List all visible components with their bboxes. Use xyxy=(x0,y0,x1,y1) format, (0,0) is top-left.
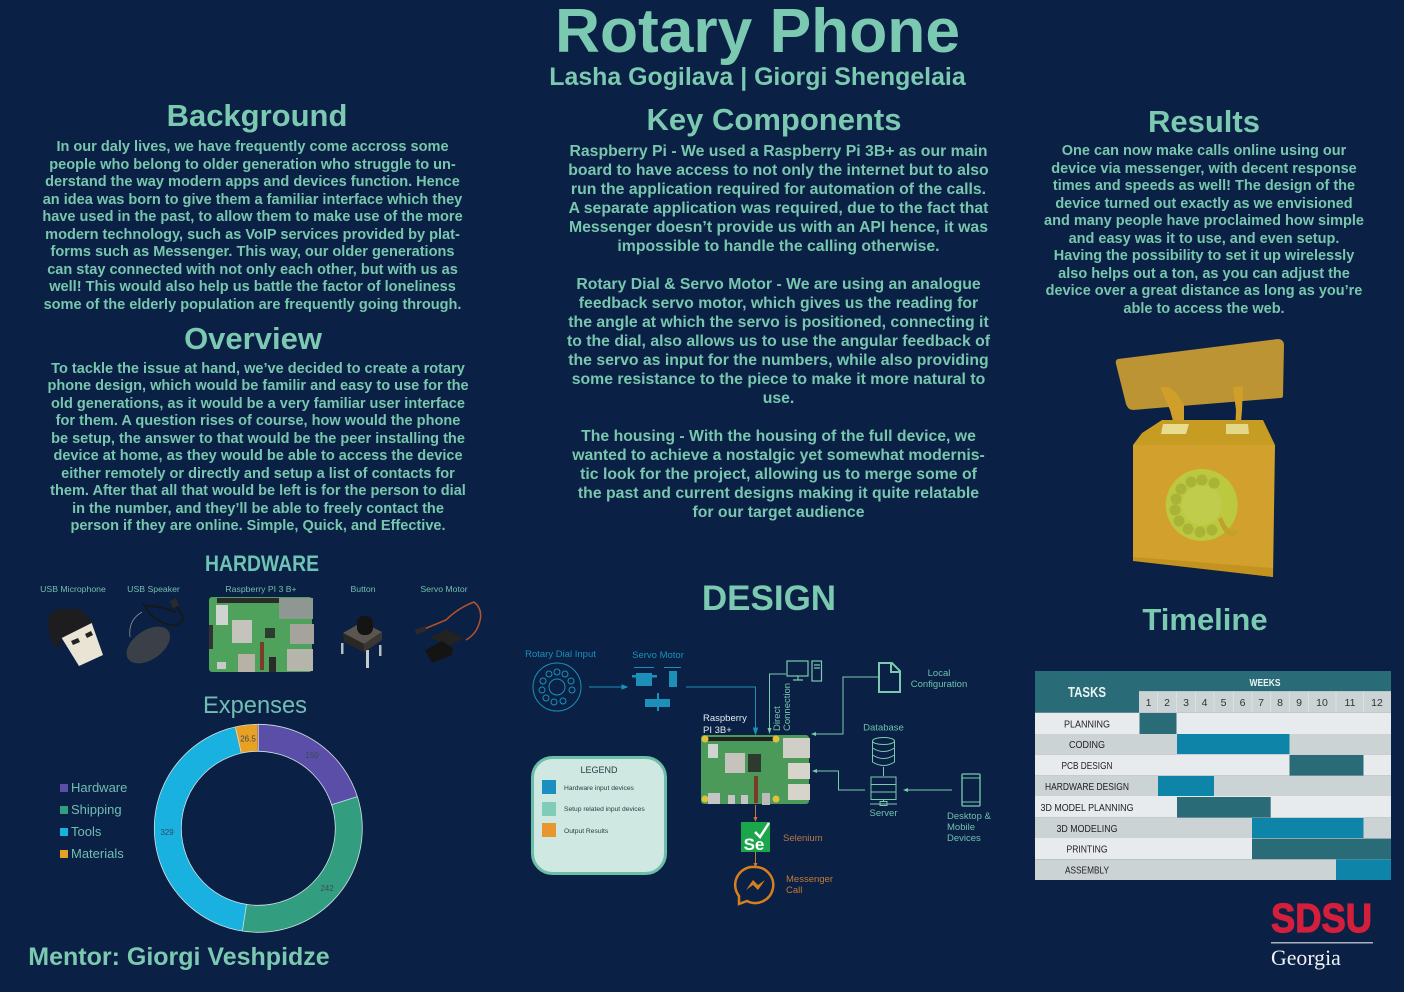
legend: design: Setup related input devices xyxy=(564,806,645,813)
gantt chart: 5 xyxy=(1221,697,1227,709)
heading: DESIGN: DESIGN xyxy=(702,579,836,618)
icon: server: Server xyxy=(870,808,897,819)
text block: Key Components xyxy=(567,143,991,521)
heading: Timeline: Timeline xyxy=(1142,602,1268,637)
arrows: output xyxy=(754,805,758,868)
text block: Background: well! This would also help us battle the factor of loneliness xyxy=(48,279,456,295)
text block: Key Components: run the application required for automation of the calls. xyxy=(571,181,986,198)
gantt chart: 3D MODELING xyxy=(1056,823,1118,835)
text block: Background: modern technology, such as VoIP services provided by plat- xyxy=(45,227,460,243)
legend: expenses: Shipping xyxy=(71,802,122,817)
hardware labels: Raspberry PI 3 B+ xyxy=(225,584,297,594)
text block: Overview: old generations, as it would be a very familiar user interface xyxy=(51,396,465,412)
text block: Overview: phone design, which would be familir and easy to use for the xyxy=(47,378,469,394)
icon: Raspberry Pi board xyxy=(209,597,314,672)
donut chart: expenses: 26.5 xyxy=(240,734,256,744)
arrows: hardware inputs xyxy=(589,685,758,734)
icon: local configuration file xyxy=(879,663,967,692)
logo: SDSU Georgia: SDSU xyxy=(1271,895,1372,941)
text block: Results: device via messenger, with decent response xyxy=(1051,161,1357,177)
text block: Key Components: Rotary Dial & Servo Motor - We are using an analogue xyxy=(576,276,981,293)
gantt chart: 7 xyxy=(1258,697,1264,709)
text block: Background xyxy=(42,139,463,313)
icon: USB speaker xyxy=(120,598,183,671)
icon: local configuration file: Configuration xyxy=(911,679,967,690)
gantt chart: 3 xyxy=(1183,697,1189,709)
icon: database xyxy=(863,722,904,776)
icon: mobile devices: Desktop & xyxy=(947,811,991,822)
icon: computer xyxy=(787,661,822,681)
text block: Results: device turned out exactly as we envisioned xyxy=(1055,196,1353,212)
icon: Messenger call xyxy=(735,867,833,904)
gantt chart: 3D MODEL PLANNING xyxy=(1040,802,1134,814)
icon: Selenium xyxy=(741,822,823,854)
text block: Key Components: impossible to handle the calling otherwise. xyxy=(617,238,940,255)
text block: Background: derstand the way modern apps and devices function. Hence xyxy=(45,174,460,190)
text block: Key Components: tic look for the project, allowing us to merge some of xyxy=(580,466,978,483)
text block: Key Components: some resistance to the piece to make it more natural to xyxy=(572,371,986,388)
icon: Raspberry Pi board diagram xyxy=(701,735,810,805)
text block: Key Components: to the dial, also allows us to use the angular feedback of xyxy=(567,333,991,350)
label: Raspberry Pi 3B+ xyxy=(703,713,747,736)
text block: Overview: them. After that all that would be left is for the person to dial xyxy=(50,483,466,499)
legend: design xyxy=(532,758,666,874)
connectors: server links xyxy=(812,769,952,792)
heading: HARDWARE: HARDWARE xyxy=(205,551,319,576)
hardware labels: USB Speaker xyxy=(127,584,180,594)
donut chart: expenses: 150 xyxy=(305,751,319,760)
authors: Lasha Gogilava | Giorgi Shengelaia xyxy=(549,63,966,91)
heading: Expenses: Expenses xyxy=(203,693,307,719)
hardware labels xyxy=(40,584,468,594)
icon: Messenger call: Messenger xyxy=(786,874,833,885)
text block: Background: an idea was born to give them a familiar interface which they xyxy=(43,192,463,208)
legend: expenses xyxy=(60,780,127,861)
hardware labels: Button xyxy=(350,584,376,594)
icon: local configuration file: Local xyxy=(928,668,950,679)
label: Raspberry Pi 3B+: Raspberry xyxy=(703,713,747,724)
gantt chart: PCB DESIGN xyxy=(1062,760,1112,772)
text block: Key Components: Raspberry Pi - We used a Raspberry Pi 3B+ as our main xyxy=(569,143,988,160)
donut chart: expenses: 329 xyxy=(160,828,174,837)
text block: Overview xyxy=(47,361,469,534)
text block: Results: times and speeds as well! The design of the xyxy=(1053,178,1355,194)
icon: Selenium: Se xyxy=(744,835,764,854)
text block: Key Components: feedback servo motor, which gives us the reading for xyxy=(579,295,978,312)
gantt chart: HARDWARE DESIGN xyxy=(1045,781,1129,793)
gantt chart: TASKS xyxy=(1068,685,1106,701)
text block: Key Components: the servo as input for the numbers, while also providing xyxy=(568,352,989,369)
hardware labels: Servo Motor xyxy=(420,584,468,594)
text block: Background: have used in the past, to allow them to make use of the more xyxy=(42,209,463,225)
gantt chart xyxy=(1035,671,1391,880)
legend: design: LEGEND xyxy=(580,765,618,775)
text block: Overview: To tackle the issue at hand, we’ve decided to create a rotary xyxy=(51,361,466,377)
gantt chart: 10 xyxy=(1316,697,1328,709)
legend: expenses: Materials xyxy=(71,846,124,861)
connector: configuration xyxy=(811,677,878,736)
icon: rotary dial input: Rotary Dial Input xyxy=(525,649,596,660)
connector: direct connection xyxy=(768,674,793,734)
text block: Results: device over a great distance as long as you’re xyxy=(1046,283,1362,299)
connector: direct connection: Connection xyxy=(782,683,793,731)
text block: Background: In our daly lives, we have frequently come accross some xyxy=(56,139,449,155)
gantt chart: 8 xyxy=(1277,697,1283,709)
gantt chart: 6 xyxy=(1240,697,1246,709)
gantt chart: 1 xyxy=(1146,697,1152,709)
logo: SDSU Georgia: Georgia xyxy=(1271,946,1341,970)
text block: Overview: either remotely or directly and setup a list of contacts for xyxy=(61,466,455,482)
text block: Results xyxy=(1044,143,1364,317)
gantt chart: PRINTING xyxy=(1066,844,1108,856)
icon: servo motor: Servo Motor xyxy=(632,650,684,661)
heading: Overview: Overview xyxy=(184,321,323,356)
text block: Overview: for them. A question rises of course, how would the phone xyxy=(56,413,460,429)
text block: Key Components: The housing - With the housing of the full device, we xyxy=(581,428,976,445)
text block: Key Components: the angle at which the servo is positioned, connecting it xyxy=(568,314,989,331)
donut chart: expenses: 242 xyxy=(320,884,334,893)
heading: Results: Results xyxy=(1148,104,1260,139)
gantt chart: CODING xyxy=(1069,739,1105,751)
text block: Overview: in the number, and they’ll be able to freely contact the xyxy=(72,501,444,517)
text block: Key Components: wanted to achieve a nostalgic yet somewhat modernis- xyxy=(571,447,985,464)
heading: Key Components: Key Components xyxy=(647,102,901,137)
logo: SDSU Georgia xyxy=(1271,895,1373,970)
gantt chart: PLANNING xyxy=(1064,718,1110,730)
text block: Key Components: board to have access to not only the internet but to also xyxy=(568,162,989,179)
text block: Background: people who belong to older generation who struggle to un- xyxy=(49,157,456,173)
text block: Results: and many people have proclaimed how simple xyxy=(1044,213,1364,229)
icon: rotary dial input xyxy=(525,649,596,711)
text block: Background: forms such as Messenger. This way, our older generations xyxy=(51,244,454,260)
text block: Overview: device at home, as they would be able to access the device xyxy=(53,448,463,464)
icon: servo motor xyxy=(415,602,481,663)
gantt chart: 9 xyxy=(1296,697,1302,709)
legend: design: Hardware input devices xyxy=(564,785,635,792)
gantt chart: 12 xyxy=(1371,697,1383,709)
gantt chart: ASSEMBLY xyxy=(1065,864,1109,876)
text block: Overview: person if they are online. Simple, Quick, and Effective. xyxy=(70,518,446,534)
text block: Overview: be setup, the answer to that would be the peer installing the xyxy=(51,431,465,447)
icon: button xyxy=(341,616,382,668)
legend: expenses: Hardware xyxy=(71,780,127,795)
gantt chart: 2 xyxy=(1164,697,1170,709)
gantt chart: 4 xyxy=(1202,697,1208,709)
icon: mobile devices xyxy=(947,774,991,844)
heading: Background: Background xyxy=(167,98,347,133)
donut chart: expenses xyxy=(154,724,362,932)
icon: mobile devices: Mobile xyxy=(947,822,975,833)
text block: Results: One can now make calls online using our xyxy=(1062,143,1347,159)
hardware labels: USB Microphone xyxy=(40,584,106,594)
text block: Key Components: A separate application was required, due to the fact that xyxy=(569,200,989,217)
legend: expenses: Tools xyxy=(71,824,102,839)
text block: Key Components: the past and current designs making it quite relatable xyxy=(578,485,979,502)
text block: Key Components: use. xyxy=(763,390,794,407)
icon: USB microphone xyxy=(48,609,103,666)
gantt chart: WEEKS xyxy=(1250,677,1280,689)
connector: direct connection: Direct xyxy=(772,706,783,731)
text block: Key Components: for our target audience xyxy=(692,504,865,521)
text block: Results: able to access the web. xyxy=(1123,301,1285,317)
text block: Results: and easy was it to use, and even setup. xyxy=(1069,231,1339,247)
text block: Results: Having the possibility to set it up wirelessly xyxy=(1054,248,1354,264)
icon: Selenium: Selenium xyxy=(783,833,823,844)
text block: Key Components: Messenger doesn’t provide us with an API hence, it was xyxy=(569,219,988,236)
text block: Background: some of the elderly population are frequently going through. xyxy=(44,297,461,313)
text block: Background: can stay connected with not only each other, but with us as xyxy=(47,262,458,278)
text block: Results: also helps out a ton, as you can adjust the xyxy=(1058,266,1350,282)
label: Raspberry Pi 3B+: PI 3B+ xyxy=(703,725,732,736)
icon: mobile devices: Devices xyxy=(947,833,981,844)
icon: database: Database xyxy=(863,722,904,734)
gantt chart: 11 xyxy=(1345,697,1356,709)
icon: Messenger call: Call xyxy=(786,885,802,896)
icon: servo motor xyxy=(632,650,684,711)
legend: design: Output Results xyxy=(564,828,609,835)
icon: server xyxy=(870,777,897,819)
mentor: Mentor: Giorgi Veshpidze xyxy=(28,943,330,971)
photo: 3D printed rotary phone xyxy=(1116,339,1284,577)
design diagram xyxy=(525,649,991,904)
